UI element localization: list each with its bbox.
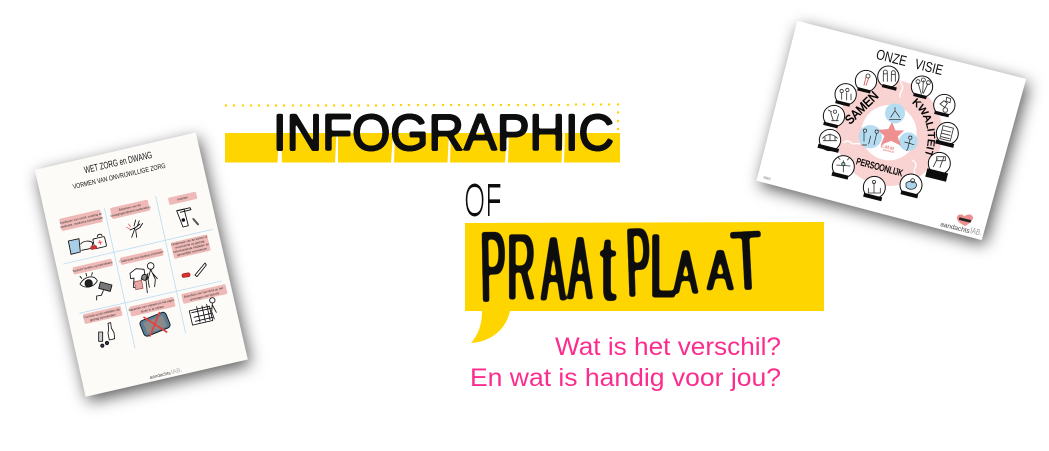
label text: Toezicht houden op betrokkene bbox=[72, 260, 113, 273]
icon: pill and knife bbox=[182, 263, 206, 278]
poster logo: aandachts bbox=[149, 370, 172, 380]
label text: beïnvloedende middelen en bbox=[173, 242, 210, 254]
bubble shape bbox=[465, 222, 824, 343]
ring word SAMEN: SAMEN bbox=[842, 89, 881, 127]
centre labels: aandacht bbox=[882, 147, 895, 154]
centre labels: E.M.M bbox=[880, 143, 895, 151]
circle sketches bbox=[823, 70, 953, 193]
poster content bbox=[763, 47, 983, 238]
icon: eye bbox=[80, 273, 97, 287]
PRAATPLAAT word: A bbox=[707, 239, 733, 304]
icon: crossed out phone bbox=[139, 311, 171, 337]
panel: right poster Onze Visie bbox=[750, 16, 1038, 254]
heading: INFOGRAPHIC bbox=[225, 103, 620, 162]
PRAATPLAAT word: P bbox=[625, 207, 652, 318]
star bbox=[878, 123, 904, 145]
poster heading bbox=[72, 150, 166, 191]
subtitle question text: En wat is handig voor jou? bbox=[470, 364, 781, 392]
INFOGRAPHIC word: INFOGRAPHIC bbox=[273, 104, 614, 161]
label text: Toedienen van vocht, voeding en bbox=[59, 211, 103, 225]
label text: woonruimte op gedrag- bbox=[175, 239, 206, 250]
poster content bbox=[59, 150, 228, 380]
icon: tied hands bbox=[127, 220, 143, 237]
icon: bottles bbox=[99, 323, 115, 347]
poster sheet bbox=[35, 133, 248, 397]
PRAATPLAAT word: A bbox=[674, 236, 698, 307]
blue circles bbox=[859, 103, 918, 151]
PRAATPLAAT word bbox=[480, 207, 764, 325]
label text: leven in te richten bbox=[141, 304, 165, 314]
label text: Onderzoek van de kamer of bbox=[171, 235, 208, 247]
label text: Beperken van vrijheid om het eigen bbox=[128, 298, 175, 312]
PRAATPLAAT word: L bbox=[650, 215, 675, 318]
PRAATPLAAT word: P bbox=[480, 211, 507, 325]
label text: gedrag beïnvloeden bbox=[89, 312, 116, 322]
label text: bewegingsvrijheid (vastbinden) bbox=[110, 205, 151, 218]
label text: Beperken van de bbox=[118, 203, 142, 212]
label text: Onderzoek aan kleding of lichaam bbox=[119, 250, 164, 264]
poster logo bbox=[149, 368, 183, 380]
label text: Beperken van het recht op het bbox=[184, 286, 224, 299]
poster heading: WET ZORG en DWANG bbox=[83, 150, 153, 176]
PRAATPLAAT word: T bbox=[729, 212, 764, 309]
dotted line bbox=[225, 103, 619, 130]
subtitle question text: Wat is het verschil? bbox=[555, 333, 781, 361]
label text bbox=[59, 195, 224, 322]
poster heading: ONZE VISIE bbox=[874, 47, 945, 79]
label text: gevaarlijke voorwerpen bbox=[177, 246, 208, 257]
ring word KWALITEIT: KWALITEIT bbox=[912, 98, 936, 156]
logo aandachtsLAB: aandachts bbox=[940, 221, 971, 235]
ring word PERSOONLIJK: PERSOONLIJK bbox=[855, 156, 904, 178]
icon circles bbox=[819, 66, 958, 198]
circle captions bbox=[817, 84, 954, 201]
label text: medicatie, medische handelingen bbox=[59, 215, 104, 229]
PRAATPLAAT word: A bbox=[568, 219, 592, 319]
subtitle question text bbox=[470, 333, 781, 392]
icon: calendar and person bbox=[189, 298, 216, 325]
yellow segmented band bbox=[225, 133, 620, 162]
icon: door handle and key bbox=[177, 208, 198, 227]
centre figures bbox=[862, 107, 914, 151]
word OF: OF bbox=[464, 174, 502, 226]
PRAATPLAAT word: R bbox=[507, 215, 535, 320]
label text: Insluiten bbox=[177, 195, 189, 202]
pink labels bbox=[59, 192, 228, 324]
pink ring bbox=[836, 79, 942, 186]
PRAATPLAAT word: t bbox=[601, 217, 615, 322]
small mark: BBS bbox=[763, 175, 772, 181]
poster logo: lAB. bbox=[171, 368, 183, 376]
speech bubble PRAATPLAAT bbox=[465, 207, 824, 343]
panel: left poster Wet Zorg en Dwang bbox=[35, 133, 248, 397]
icon: camera bbox=[97, 282, 112, 300]
poster heading: VORMEN VAN ONVRIJWILLIGE ZORG bbox=[72, 163, 166, 191]
grid lines bbox=[63, 196, 222, 348]
logo aandachtsLAB: lAB. bbox=[970, 225, 983, 238]
icons bbox=[68, 208, 216, 347]
icon: glass pills first aid bbox=[68, 234, 107, 254]
label text: Controle op de middelen die bbox=[83, 307, 121, 320]
icon: shirt magnifier person bbox=[130, 263, 157, 293]
poster sheet bbox=[757, 21, 1026, 240]
PRAATPLAAT word: A bbox=[542, 217, 565, 320]
label text: ontvangen van bezoek bbox=[189, 291, 220, 302]
logo aandachtsLAB bbox=[940, 214, 983, 238]
